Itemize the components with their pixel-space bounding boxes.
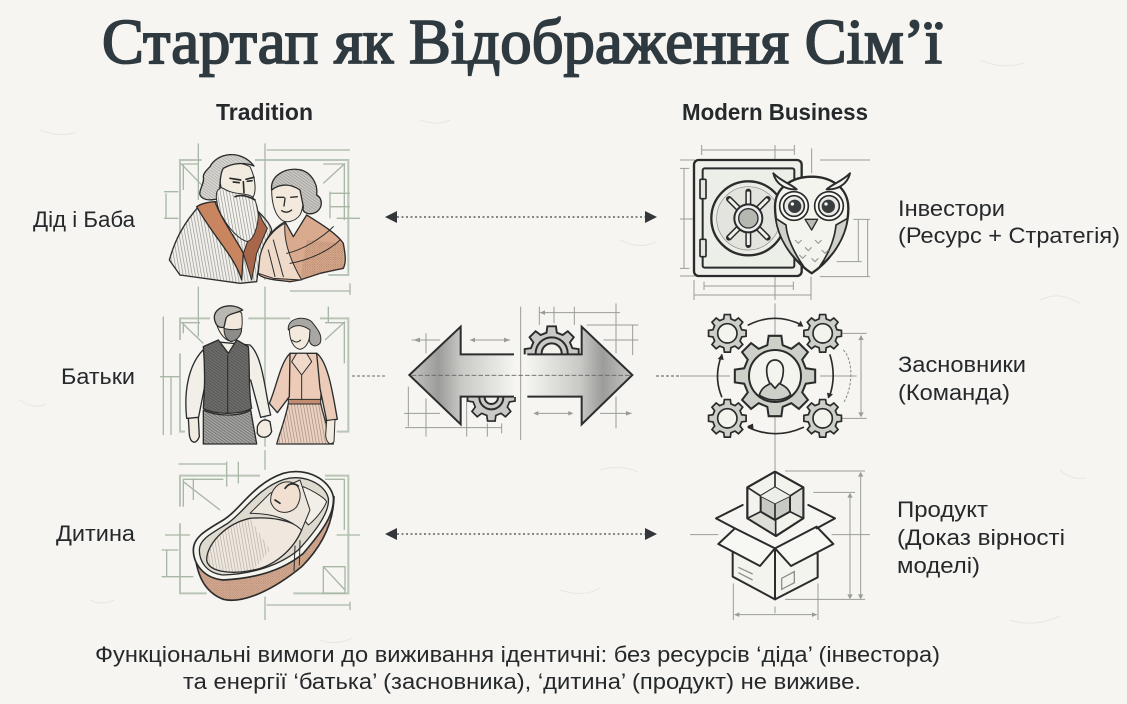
left arrow [409,327,514,424]
label: Батьки: Батьки [61,364,135,389]
illustration: grandparents [164,143,360,295]
dashed connector: founders [656,375,726,377]
icon: safe and owl [680,145,870,300]
box body [733,548,818,599]
icon: founders gears [680,303,867,450]
orbit arrows [717,318,833,434]
person [767,360,783,388]
man body [169,202,272,283]
cube [747,472,803,536]
label: product [897,497,1065,578]
safe [694,160,802,276]
label: founders: Засновники [898,352,1026,377]
illustration: baby in basket [162,450,360,620]
woman head [272,185,303,222]
bottom conclusion text: Функціональні вимоги до виживання ідентичні: без ресурсів ‘діда’ (інвестора) [95,642,940,667]
label: founders [898,352,1026,405]
man head [218,163,255,198]
heading: Modern Business: Modern Business [682,99,868,125]
label: Дід і Баба: Дід і Баба [33,207,135,232]
man figure [203,410,257,444]
label: founders: (Команда) [898,380,1010,405]
bottom conclusion text [95,642,940,694]
label: investors: Інвестори [898,196,1005,221]
heading: Tradition: Tradition [216,99,313,125]
illustration: parents [160,287,348,447]
basket [195,497,334,600]
dotted arrow: grandparents to investors [385,211,657,223]
label: product: Продукт [897,497,988,522]
baby head [271,482,300,512]
icon: product box with cube [690,450,870,620]
title: Стартап як Відображення Сім’ї [102,7,942,77]
label: investors: (Ресурс + Стратегія) [898,223,1120,248]
gear bottom [466,397,516,422]
small gears [709,315,746,352]
gear top [524,325,580,354]
joined hands [257,420,272,437]
label: Дитина: Дитина [56,521,136,546]
dashed connector: parents [352,375,386,377]
woman figure [277,403,333,444]
bottom conclusion text: та енергії ‘батька’ (засновника), ‘дитина’ (продукт) не виживе. [183,669,861,694]
label: product: (Доказ вірності [897,525,1065,550]
owl [775,177,848,273]
central double arrow with gears [404,303,638,440]
woman shawl [258,215,345,282]
label: product: моделі) [897,553,980,578]
blanket [207,518,302,572]
main gear [735,336,815,416]
dotted arrow: baby to product [385,528,657,540]
label: investors [898,196,1120,248]
dial [711,181,785,255]
right arrow [527,327,632,424]
